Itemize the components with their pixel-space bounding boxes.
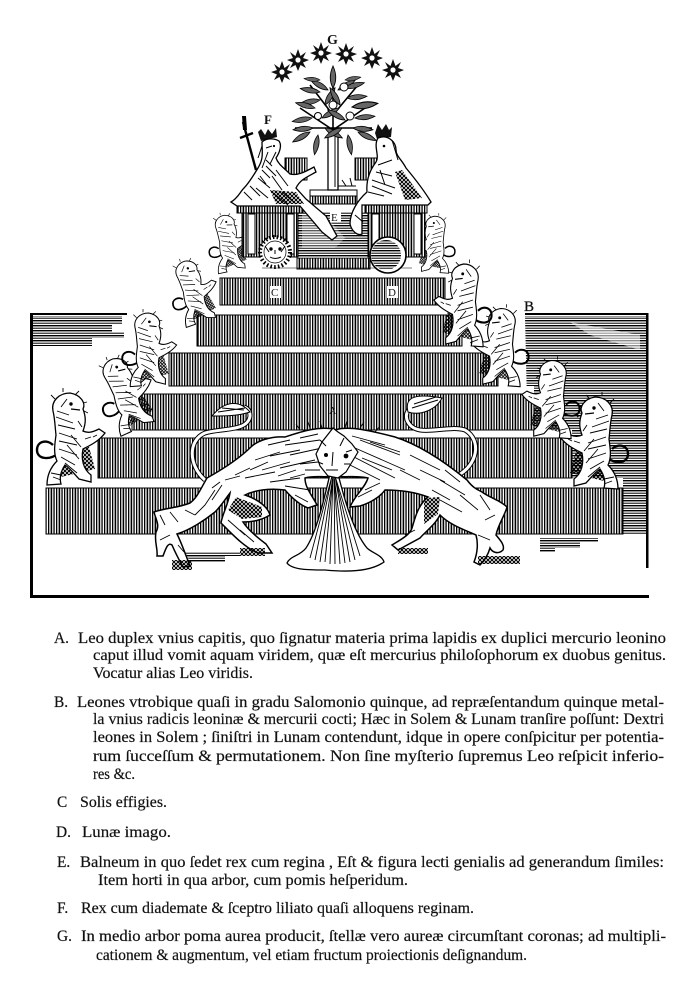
step 6 [46, 488, 623, 534]
queen [350, 124, 431, 235]
legend entry F: Rex cum diademate & ſceptro liliato quaſi alloquens reginam. [81, 900, 474, 917]
legend entry E: Item horti in qua arbor, cum pomis heſperidum. [98, 872, 408, 889]
label A: A [329, 406, 337, 417]
label G: G [327, 33, 338, 48]
tail left [192, 403, 250, 480]
legend entry G: In medio arbor poma aurea producit, ſtellæ vero aureæ circumſtant coronas; ad multipli- [81, 928, 666, 945]
label E: E [331, 212, 338, 224]
back pillars [285, 158, 377, 180]
label B: B [524, 299, 534, 315]
label F: F [264, 112, 272, 127]
legend entry B: B. [54, 694, 68, 711]
tail right [406, 396, 476, 476]
icon: moon disc [370, 237, 406, 273]
legend entry B: Leones vtrobique quaſi in gradu Salomonio quinque, ad repræſentandum quinque metal- [77, 694, 664, 711]
legend entry E [57, 854, 664, 889]
ground shadows [172, 548, 520, 570]
legend entry C: Solis effigies. [80, 794, 167, 811]
legend entry A: caput illud vomit aquam viridem, quæ eſt mercurius philoſophorum ex duobus genitus. [93, 647, 666, 664]
legend entry B: res &c. [93, 766, 135, 783]
legend entry B: leones in Solem ; ſiniſtri in Lunam contendunt, idque in opere conſpicitur per potentia- [93, 729, 664, 746]
legend entry G [57, 928, 666, 964]
legend entry G: cationem & augmentum, vel etiam fructum proiectionis deſignandum. [96, 947, 527, 964]
legend entry A: Vocatur alias Leo viridis. [93, 665, 253, 682]
legend entry F: F. [57, 900, 68, 917]
step 1 with letters [220, 278, 445, 305]
legend entry A [54, 630, 666, 682]
legend entry B [54, 694, 664, 783]
step 4 [132, 394, 534, 430]
bath [297, 212, 370, 258]
stars [271, 42, 404, 83]
step 3 [169, 353, 498, 386]
legend entry D: D. [56, 824, 71, 841]
label E [330, 211, 341, 224]
double lion: right body [335, 421, 507, 565]
altar under tree [310, 190, 357, 204]
small lions left [37, 209, 254, 485]
step 1 with letters: C [271, 287, 278, 299]
icon: sun face [260, 237, 290, 267]
tree foliage [291, 66, 378, 155]
double lion: shared head [316, 428, 358, 478]
legend entry A: Leo duplex vnius capitis, quo ſignatur materia prima lapidis ex duplici mercurio leonino [78, 630, 666, 647]
legend entry B: la vnius radicis leoninæ & mercurii cocti; Hæc in Solem & Lunam tranſire poſſunt: Dextri [93, 711, 664, 728]
step 1 with letters: D [388, 287, 396, 299]
step 2 [197, 315, 462, 346]
step 5 [98, 438, 572, 478]
scepter [240, 116, 256, 170]
right throne block [365, 205, 427, 257]
label B [523, 298, 537, 315]
legend entry G: G. [57, 928, 72, 945]
green water stream [287, 470, 384, 571]
legend entry E: E. [57, 854, 70, 871]
legend entry B: rum ſucceſſum & permutationem. Non ſine myſterio ſupremus Leo reſpicit inferio- [93, 748, 664, 765]
background hatching [33, 316, 646, 562]
upper base [262, 258, 412, 269]
king [231, 128, 337, 240]
left throne block [237, 205, 303, 257]
legend entry A: A. [54, 630, 69, 647]
white step treads [46, 305, 623, 488]
double lion: left body [154, 421, 350, 567]
tree trunk [328, 135, 356, 190]
legend entry C: C [57, 794, 67, 811]
legend entry E: Balneum in quo ſedet rex cum regina , Eſt & figura lecti genialis ad generandum ſimiles: [80, 854, 664, 871]
legend entry D: Lunæ imago. [82, 824, 171, 841]
small lions right [413, 213, 628, 489]
frame [30, 313, 649, 598]
